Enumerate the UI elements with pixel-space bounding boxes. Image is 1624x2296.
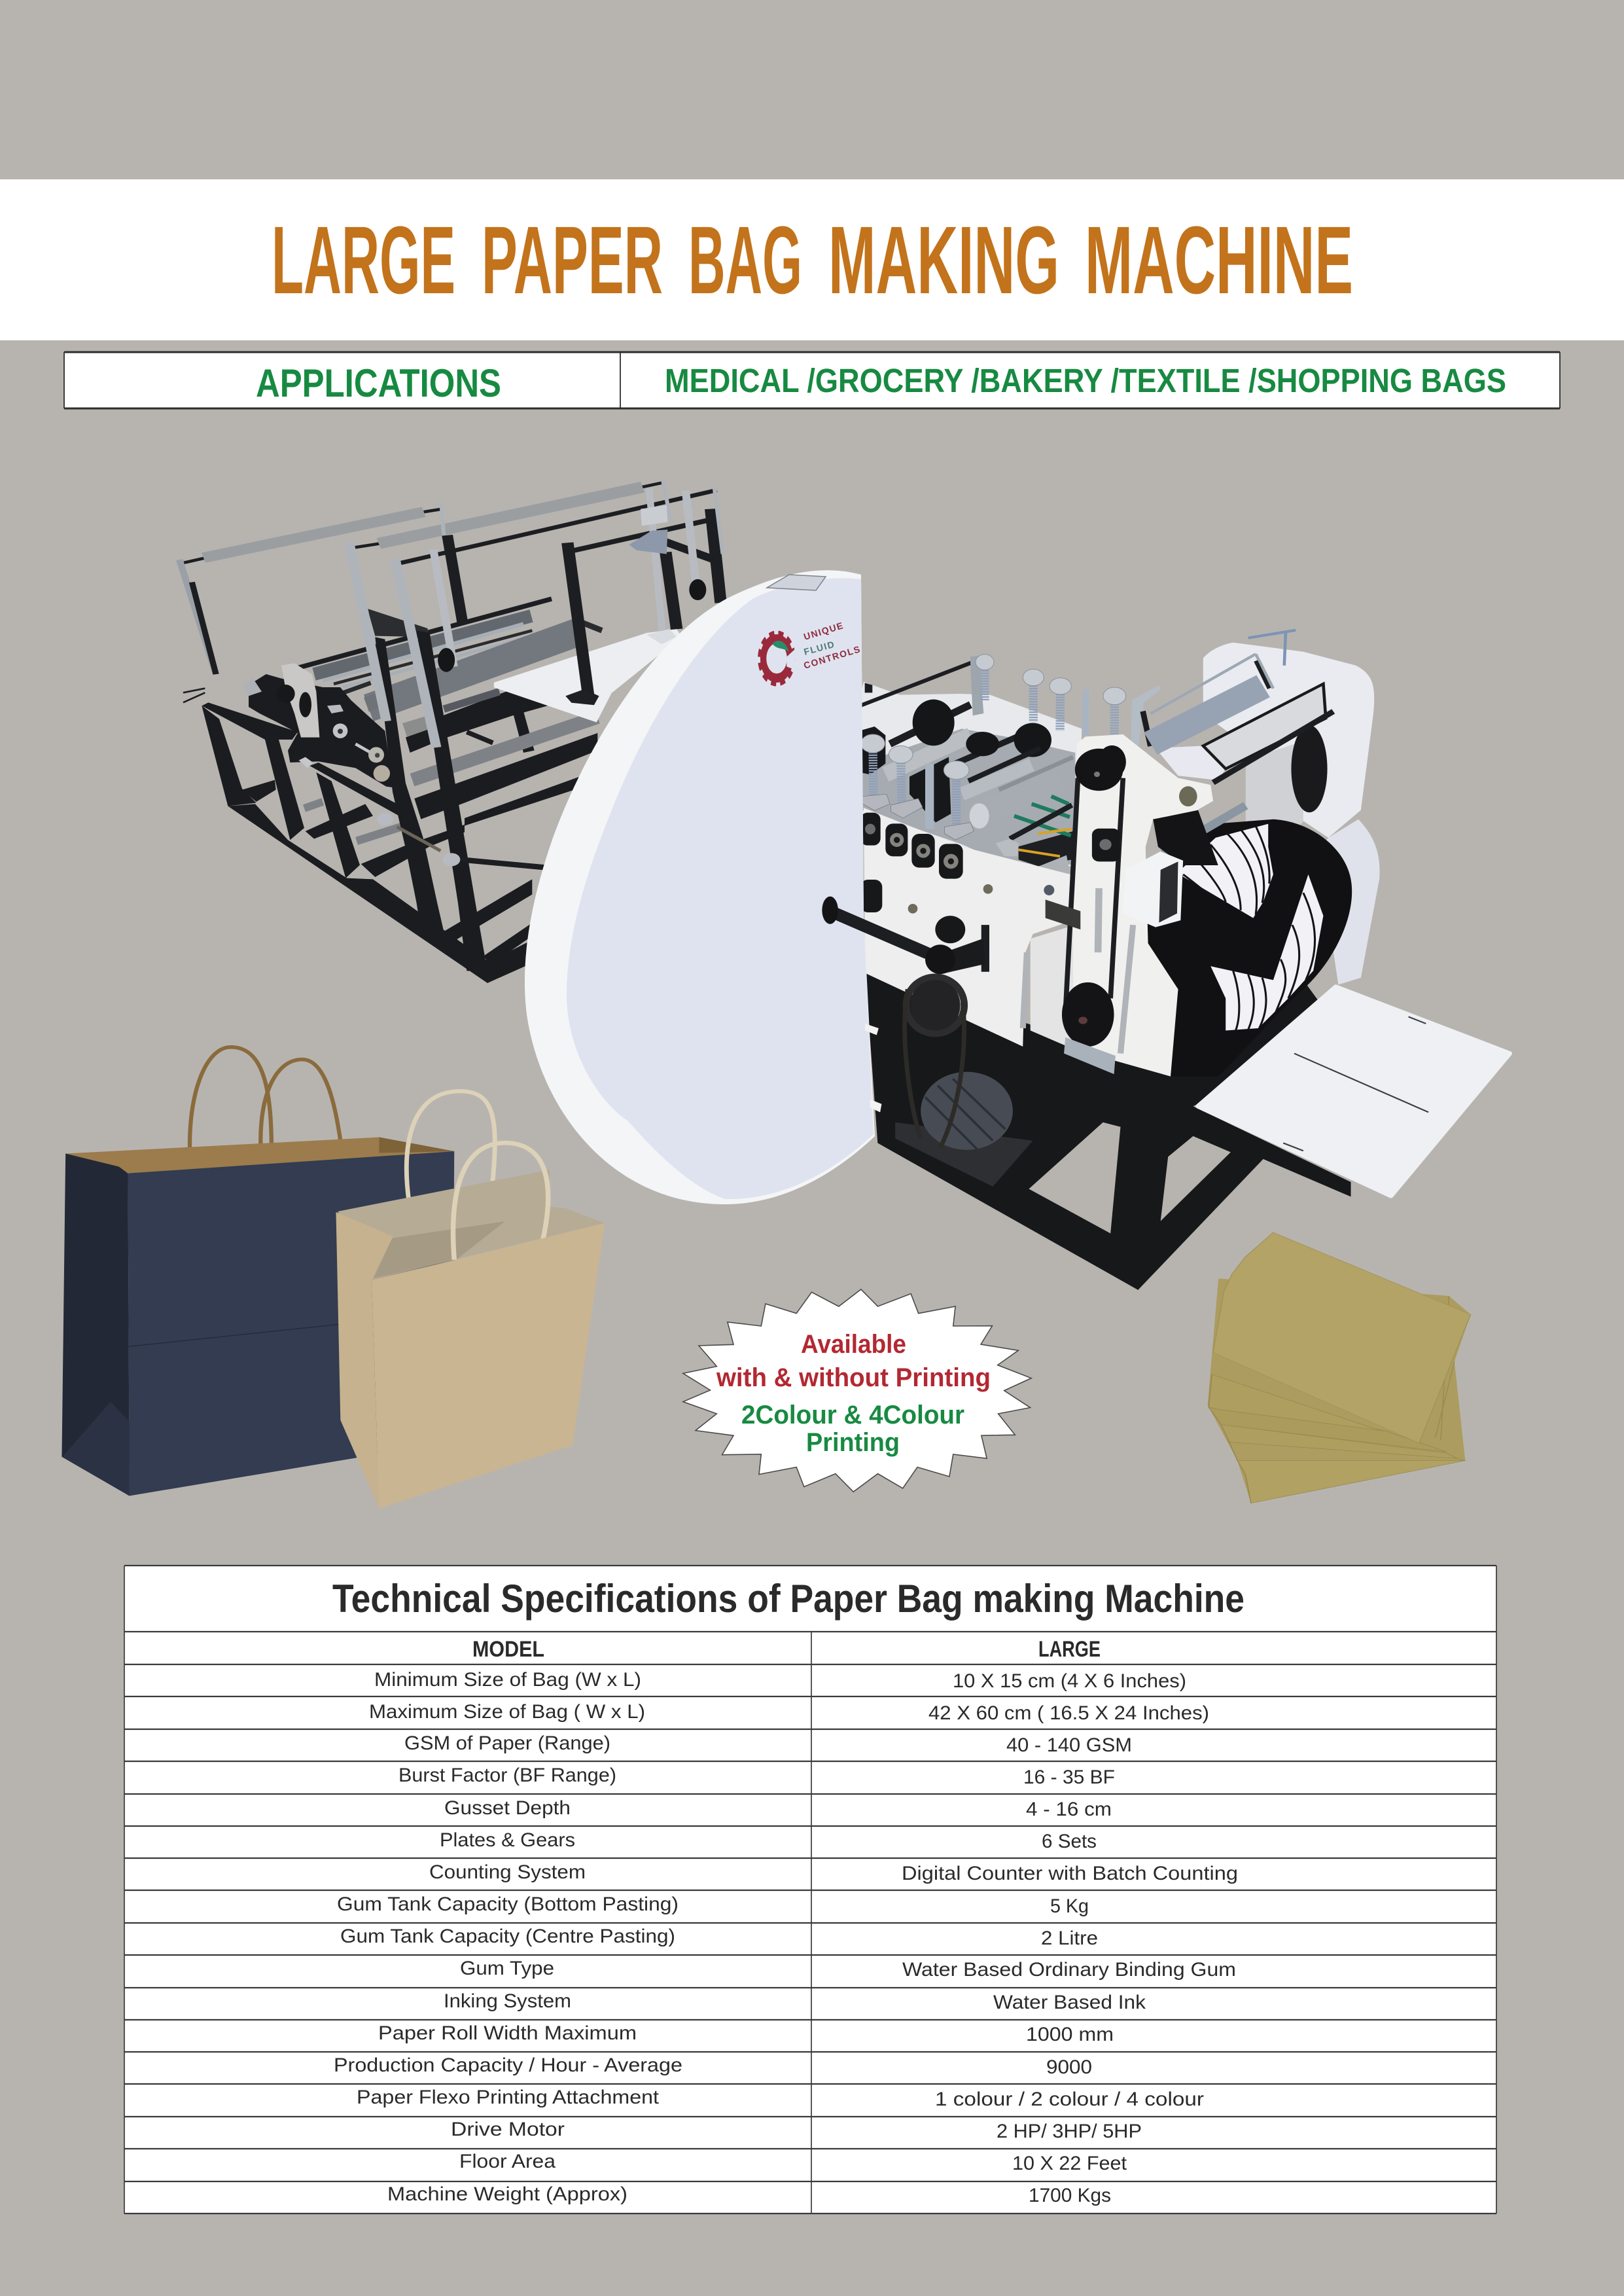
kraft bag bbox=[336, 1091, 605, 1509]
specification labels column: Paper Roll Width Maximum bbox=[378, 2022, 637, 2044]
specification labels column: Paper Flexo Printing Attachment bbox=[357, 2087, 660, 2108]
top bag sheet bbox=[1213, 1232, 1471, 1443]
specification labels column bbox=[334, 1637, 682, 2205]
unwinder frame, rollers and side gears bbox=[183, 599, 602, 983]
logo wordmark: FLUID bbox=[803, 639, 836, 657]
logo gear bbox=[760, 634, 796, 683]
side gear mass bbox=[249, 674, 394, 787]
title: BAG bbox=[688, 207, 802, 314]
specification values column: LARGE bbox=[1038, 1637, 1101, 1662]
cylinder disc of machine bbox=[525, 570, 875, 1204]
unwinder rear rods and foam rollers bbox=[179, 479, 723, 674]
delivery tray bbox=[1198, 987, 1509, 1196]
applications label: APPLICATIONS bbox=[256, 361, 501, 405]
rollers bbox=[299, 599, 552, 668]
specification values column: Digital Counter with Batch Counting bbox=[902, 1863, 1238, 1884]
starburst text: Printing bbox=[806, 1428, 900, 1457]
specification values column: 10 X 22 Feet bbox=[1012, 2153, 1127, 2174]
drive belt and pulley bbox=[910, 978, 961, 1032]
flat paper bags bbox=[1208, 1232, 1471, 1503]
specification values column: 5 Kg bbox=[1050, 1895, 1089, 1917]
applications list: MEDICAL /GROCERY /BAKERY /TEXTILE /SHOPPING BAGS bbox=[665, 362, 1506, 399]
title: LARGE bbox=[272, 207, 455, 314]
disc face bbox=[567, 578, 874, 1199]
specification labels column: Gum Tank Capacity (Centre Pasting) bbox=[340, 1926, 675, 1947]
specification values column: 4 - 16 cm bbox=[1026, 1799, 1112, 1820]
specification values column: 6 Sets bbox=[1042, 1831, 1097, 1852]
title banner bbox=[0, 179, 1624, 340]
finishing section: arm, top rollers, control box and tray bbox=[895, 630, 1509, 1196]
specification labels column: Machine Weight (Approx) bbox=[387, 2183, 627, 2205]
specification values column: 10 X 15 cm (4 X 6 Inches) bbox=[953, 1670, 1186, 1692]
specification labels column: Production Capacity / Hour - Average bbox=[334, 2054, 682, 2076]
starburst text: with & without Printing bbox=[716, 1363, 991, 1392]
specification labels column: Floor Area bbox=[459, 2151, 556, 2172]
unwinder silver arms and folding table bbox=[349, 488, 706, 747]
title: MACHINE bbox=[1085, 207, 1353, 314]
specification labels column: Inking System bbox=[444, 1990, 571, 2012]
specification labels column: MODEL bbox=[472, 1637, 544, 1662]
starburst text bbox=[716, 1330, 991, 1457]
specification labels column: Plates & Gears bbox=[440, 1829, 575, 1851]
navy bag bbox=[62, 1047, 454, 1496]
machine illustration bbox=[179, 479, 1509, 1290]
starburst text: Available bbox=[801, 1330, 906, 1359]
specification labels column: Burst Factor (BF Range) bbox=[398, 1765, 616, 1786]
printing options starburst bbox=[683, 1289, 1031, 1492]
specification labels column: Gum Type bbox=[460, 1958, 554, 1979]
finishing section: side plate bbox=[864, 808, 1073, 1049]
specification values column: 2 HP/ 3HP/ 5HP bbox=[997, 2121, 1142, 2142]
specification labels column: Maximum Size of Bag ( W x L) bbox=[369, 1701, 645, 1723]
specification labels column: GSM of Paper (Range) bbox=[404, 1732, 610, 1754]
specification labels column: Drive Motor bbox=[451, 2119, 565, 2140]
title: MAKING bbox=[828, 207, 1059, 314]
logo wordmark bbox=[802, 620, 862, 671]
uprights bbox=[375, 637, 444, 931]
title: PAPER bbox=[482, 207, 663, 314]
starburst text: 2Colour & 4Colour bbox=[741, 1401, 964, 1429]
specification labels column: Gum Tank Capacity (Bottom Pasting) bbox=[337, 1893, 679, 1915]
specification values column: Water Based Ordinary Binding Gum bbox=[902, 1959, 1236, 1981]
logo wordmark: UNIQUE bbox=[802, 620, 845, 642]
specification values column: 42 X 60 cm ( 16.5 X 24 Inches) bbox=[928, 1702, 1209, 1724]
delivery arm bbox=[1073, 734, 1213, 1077]
specification values column: 1700 Kgs bbox=[1029, 2185, 1111, 2206]
base frame bbox=[228, 804, 527, 983]
front hand rod bbox=[822, 897, 955, 1112]
title bbox=[272, 207, 1353, 314]
technical specifications table bbox=[124, 1566, 1496, 2214]
specification values column: Water Based Ink bbox=[993, 1992, 1146, 2013]
paper shopping bags bbox=[62, 1047, 605, 1509]
lower foam rollers bbox=[412, 717, 597, 780]
finishing section: bolts and bearing blocks bbox=[860, 655, 1160, 914]
specification values column bbox=[902, 1637, 1238, 2206]
specification labels column: Gusset Depth bbox=[444, 1797, 571, 1819]
specification labels column: Minimum Size of Bag (W x L) bbox=[374, 1669, 641, 1691]
disc slot bbox=[767, 575, 826, 590]
specification values column: 1 colour / 2 colour / 4 colour bbox=[935, 2089, 1204, 2110]
link rod and clamps bbox=[397, 827, 440, 851]
finishing section: table and inner mechanism bbox=[857, 656, 1082, 878]
table heading: Technical Specifications of Paper Bag making Machine bbox=[332, 1577, 1244, 1621]
specification values column: 40 - 140 GSM bbox=[1006, 1734, 1132, 1756]
specification values column: 9000 bbox=[1046, 2056, 1092, 2078]
long beams bbox=[414, 733, 597, 819]
applications bar bbox=[64, 352, 1560, 408]
specification values column: 2 Litre bbox=[1041, 1928, 1098, 1949]
specification values column: 1000 mm bbox=[1026, 2024, 1114, 2045]
black rollers bbox=[857, 662, 973, 707]
control box bbox=[1123, 852, 1183, 927]
finishing section: housing, base frame and drum bbox=[865, 643, 1380, 1290]
specification values column: 16 - 35 BF bbox=[1023, 1767, 1115, 1788]
motor bbox=[895, 1122, 1033, 1187]
logo wordmark: CONTROLS bbox=[802, 643, 862, 671]
specification labels column: Counting System bbox=[429, 1861, 586, 1883]
